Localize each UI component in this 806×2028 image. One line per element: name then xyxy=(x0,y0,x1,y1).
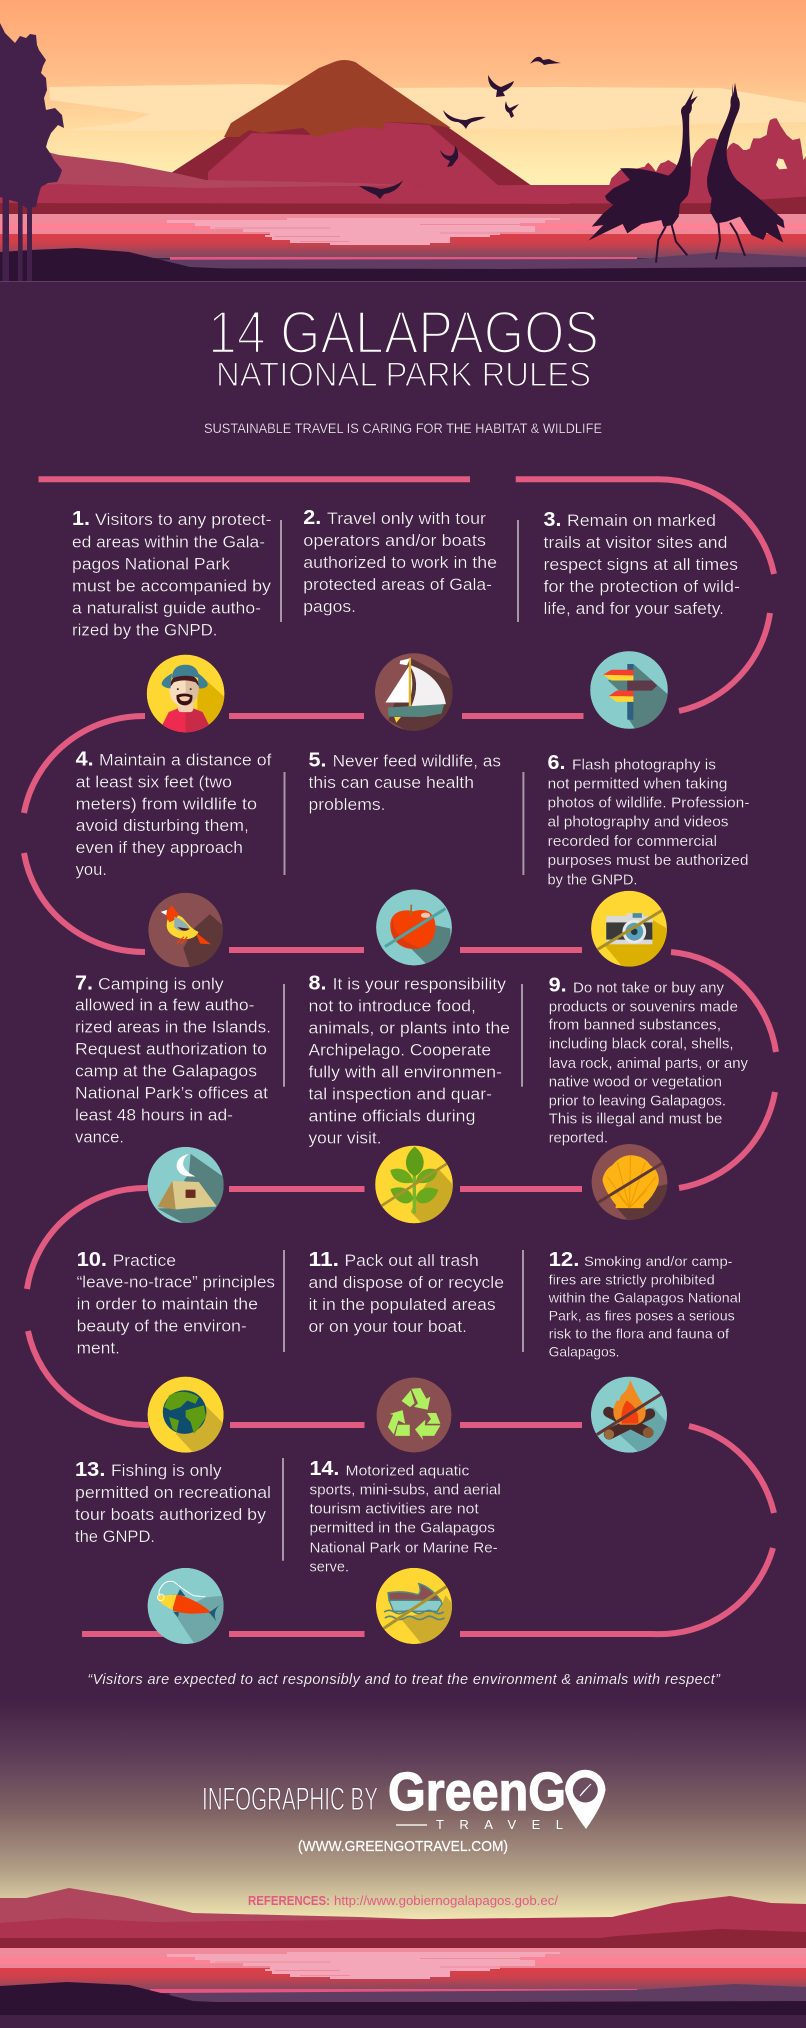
rule 8 xyxy=(308,972,510,1147)
rule 9 text: Do not take or buy any xyxy=(573,979,724,996)
rule 8 text: your visit. xyxy=(308,1128,382,1147)
rule 5 xyxy=(308,750,501,814)
rule 12 text: Galapagos. xyxy=(549,1343,620,1359)
rule 2 text: pagos. xyxy=(303,597,356,616)
rule 9: 9. xyxy=(549,975,567,997)
rule 10 text: Practice xyxy=(113,1251,176,1270)
website: (WWW.GREENGOTRAVEL.COM) xyxy=(298,1838,508,1855)
rule 3 text: life, and for your safety. xyxy=(544,599,724,618)
rule 9 text: products or souvenirs made xyxy=(549,999,738,1016)
logo: GreenGo Travel: GreenG xyxy=(388,1762,566,1822)
rule 5 text: problems. xyxy=(308,795,386,814)
rule 13 text: the GNPD. xyxy=(75,1527,155,1546)
credit: infographic by: INFOGRAPHIC BY xyxy=(202,1781,378,1817)
logo pin xyxy=(565,1770,606,1829)
rule 9 text: lava rock, animal parts, or any xyxy=(549,1055,748,1072)
rule 14 text: sports, mini-subs, and aerial xyxy=(310,1481,501,1498)
rule 1 text: Visitors to any protect- xyxy=(95,510,272,529)
rule 11 text: or on your tour boat. xyxy=(308,1317,467,1336)
rule 2 xyxy=(303,507,497,616)
rule 14: 14. xyxy=(310,1458,339,1480)
rule 8 text: It is your responsibility xyxy=(333,974,507,993)
rule 9 text: including black coral, shells, xyxy=(549,1036,734,1053)
flying birds xyxy=(359,57,561,199)
rule 8 text: not to introduce food, xyxy=(308,996,476,1015)
rule 11 xyxy=(308,1249,504,1336)
rule 12 text: within the Galapagos National xyxy=(548,1289,741,1305)
rule 7: 7. xyxy=(75,972,93,994)
rule 1 text: a naturalist guide autho- xyxy=(72,598,261,617)
rule 5: 5. xyxy=(308,750,326,772)
rule 3 text: trails at visitor sites and xyxy=(544,533,728,552)
rule 1 text: pagos National Park xyxy=(72,554,231,573)
rule 6 text: photos of wildlife. Profession- xyxy=(548,795,750,812)
icon: sailboat xyxy=(375,653,453,733)
rule 8 text: Archipelago. Cooperate xyxy=(308,1040,491,1059)
rule 7 text xyxy=(75,974,271,1147)
logo: GreenGo Travel: TRAVEL xyxy=(436,1817,563,1832)
volcano xyxy=(171,60,532,186)
rule 12 xyxy=(548,1249,741,1359)
icon: bird xyxy=(148,893,223,968)
rule 4 text: even if they approach xyxy=(76,838,243,857)
rule 9 xyxy=(549,975,748,1147)
dancing cranes xyxy=(588,83,785,263)
rule 6 text: by the GNPD. xyxy=(548,871,638,888)
rule 3 xyxy=(544,509,740,618)
rule 3 text: respect signs at all times xyxy=(544,555,738,574)
closing quote: “Visitors are expected to act responsibly and to treat the environment & animals with respect” xyxy=(87,1672,721,1688)
rule 14 text: permitted in the Galapagos xyxy=(310,1520,495,1537)
rule 13 text: tour boats authorized by xyxy=(75,1505,267,1524)
title: NATIONAL PARK RULES xyxy=(216,356,591,394)
rule 10: 10. xyxy=(77,1249,107,1271)
rule 3 text: Remain on marked xyxy=(567,511,716,530)
rule 11 text: it in the populated areas xyxy=(308,1295,496,1314)
rule 2 text: Travel only with tour xyxy=(327,509,486,528)
rule 4 text: you. xyxy=(76,860,107,879)
rule 2 text: protected areas of Gala- xyxy=(303,575,492,594)
rule 8 text: antine officials during xyxy=(308,1106,476,1125)
rule 6 xyxy=(548,752,750,888)
rule 8: 8. xyxy=(308,972,326,994)
icon: no jet ski xyxy=(376,1568,454,1647)
rule 4 text: at least six feet (two xyxy=(76,773,232,792)
icon: no shells xyxy=(592,1144,670,1223)
rule 6: 6. xyxy=(548,752,566,774)
icon: no plants leaf xyxy=(375,1146,455,1225)
rule 7 text: rized areas in the Islands. xyxy=(75,1018,271,1037)
hero landscape illustration xyxy=(0,0,806,282)
rule 7 text: least 48 hours in ad- xyxy=(75,1106,233,1125)
rule 4 text: avoid disturbing them, xyxy=(76,816,249,835)
rule 12 text xyxy=(548,1253,741,1359)
rule 1 xyxy=(72,508,272,639)
rule 7 text: allowed in a few autho- xyxy=(75,996,254,1015)
rule 14 text: serve. xyxy=(310,1559,349,1576)
rule 1 text: ed areas within the Gala- xyxy=(72,532,265,551)
rule 5 text: Never feed wildlife, as xyxy=(333,752,501,771)
rule 14 text xyxy=(310,1462,501,1576)
rule 12 text: Park, as fires poses a serious xyxy=(549,1307,735,1323)
rule 10 text: “leave-no-trace” principles xyxy=(77,1272,275,1291)
rule 5 text: this can cause health xyxy=(308,773,474,792)
icon: fish xyxy=(148,1568,224,1645)
footer landscape illustration xyxy=(0,1700,806,2015)
rule 2: 2. xyxy=(303,507,321,529)
rule 14 text: Motorized aquatic xyxy=(346,1462,470,1479)
references: http://www.gobiernogalapagos.gob.ec/ xyxy=(334,1893,558,1908)
rule 4: 4. xyxy=(76,749,94,771)
icon: globe xyxy=(148,1377,225,1455)
rule 6 text: recorded for commercial xyxy=(548,833,717,850)
rule 6 text: not permitted when taking xyxy=(548,775,728,792)
title: 14 GALAPAGOS xyxy=(208,299,599,366)
rule 2 text: authorized to work in the xyxy=(303,553,497,572)
rule 12: 12. xyxy=(549,1249,579,1271)
icon: recycle xyxy=(377,1378,451,1452)
icon: signpost xyxy=(590,651,671,731)
rule 1: 1. xyxy=(72,508,90,530)
rule 4 text: meters) from wildlife to xyxy=(76,795,257,814)
rule 9 text: prior to leaving Galapagos. xyxy=(549,1093,726,1110)
rule 11 text xyxy=(308,1251,504,1336)
rule 6 text: Flash photography is xyxy=(572,756,716,773)
rule 13: 13. xyxy=(75,1459,105,1481)
icon: guide person xyxy=(147,655,226,736)
rule 7 text: National Park’s offices at xyxy=(75,1084,268,1103)
rule 10 text: beauty of the environ- xyxy=(77,1316,247,1335)
rule 4 text: Maintain a distance of xyxy=(99,751,272,770)
rule 3: 3. xyxy=(544,509,562,531)
rule 11 text: Pack out all trash xyxy=(344,1251,479,1270)
rule 9 text: This is illegal and must be xyxy=(549,1111,722,1128)
title xyxy=(208,299,599,394)
rule 4 xyxy=(76,749,272,879)
column dividers xyxy=(281,520,523,1561)
rule 11: 11. xyxy=(308,1249,339,1271)
winding road connector xyxy=(24,479,776,1634)
rule 12 text: fires are strictly prohibited xyxy=(549,1271,715,1287)
rule 13 text: Fishing is only xyxy=(111,1461,222,1480)
rule 14 text: tourism activities are not xyxy=(310,1501,480,1518)
rule 10 text: in order to maintain the xyxy=(77,1294,258,1313)
rule 8 text: fully with all environmen- xyxy=(308,1062,502,1081)
rule 8 text: tal inspection and quar- xyxy=(308,1084,492,1103)
icon: no feeding apple xyxy=(376,890,452,966)
rule 12 text: risk to the flora and fauna of xyxy=(549,1325,729,1341)
icon: no flash camera xyxy=(591,891,670,968)
rule 9 text: from banned substances, xyxy=(549,1017,721,1034)
references: REFERENCES: xyxy=(248,1893,330,1908)
rule 7 text: Camping is only xyxy=(98,974,224,993)
hills xyxy=(0,150,806,214)
lake xyxy=(0,214,806,282)
forest right xyxy=(570,118,806,214)
rule 3 text xyxy=(544,511,740,618)
rule 7 text: Request authorization to xyxy=(75,1040,267,1059)
rule 8 text: animals, or plants into the xyxy=(308,1018,510,1037)
rule 13 text: permitted on recreational xyxy=(75,1483,271,1502)
rule 10 text: ment. xyxy=(77,1338,120,1357)
rule 5 text xyxy=(308,752,501,814)
rule 3 text: for the protection of wild- xyxy=(544,577,740,596)
rule 10 text xyxy=(77,1251,275,1357)
rule 7 text: vance. xyxy=(75,1128,124,1147)
rule 6 text: al photography and videos xyxy=(548,814,728,831)
rule 7 xyxy=(75,972,271,1147)
rule 2 text xyxy=(303,509,497,616)
rule 7 text: camp at the Galapagos xyxy=(75,1062,257,1081)
rule 8 text xyxy=(308,974,510,1147)
rule 4 text xyxy=(76,751,272,879)
rule 1 text xyxy=(72,510,272,639)
icon: no campfire xyxy=(591,1377,667,1453)
rule 9 text xyxy=(549,979,748,1147)
icon: tent and moon xyxy=(148,1147,224,1223)
rule 2 text: operators and/or boats xyxy=(303,531,486,550)
tree silhouette left xyxy=(0,23,64,281)
rule 6 text: purposes must be authorized xyxy=(548,852,748,869)
rule 14 text: National Park or Marine Re- xyxy=(310,1539,498,1556)
rule 12 text: Smoking and/or camp- xyxy=(584,1253,733,1269)
subtitle: SUSTAINABLE TRAVEL IS CARING FOR THE HABITAT & WILDLIFE xyxy=(204,420,602,436)
rule 13 text xyxy=(75,1461,271,1546)
rule 1 text: must be accompanied by xyxy=(72,576,272,595)
rule 14 xyxy=(310,1458,501,1576)
rule 9 text: native wood or vegetation xyxy=(549,1074,722,1091)
rule 10 xyxy=(77,1249,275,1357)
rule 1 text: rized by the GNPD. xyxy=(72,620,218,639)
rule 11 text: and dispose of or recycle xyxy=(308,1273,504,1292)
rule 9 text: reported. xyxy=(549,1130,608,1147)
rule 6 text xyxy=(548,756,750,888)
rule 13 xyxy=(75,1459,271,1546)
